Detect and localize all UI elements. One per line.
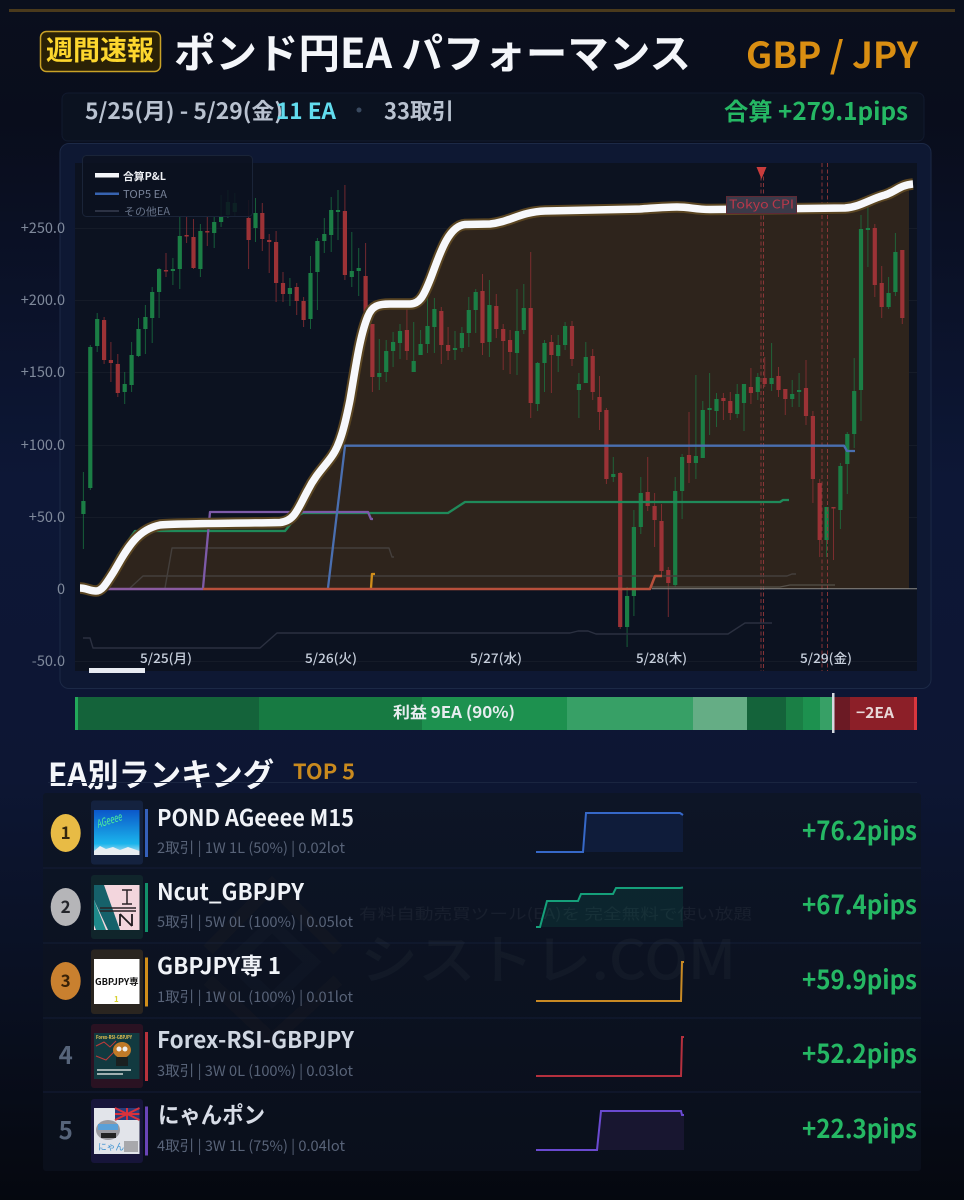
summary bar: 11 EA [276, 94, 337, 126]
thumbnail: nyanpon [91, 1099, 143, 1163]
watermark: シストレ.COM [360, 916, 736, 995]
thumbnail: GBPJPY専 [91, 950, 143, 1014]
row 1: 1 [61, 819, 71, 844]
row 1: +76.2pips [802, 811, 917, 848]
summary bar: 合算 +279.1pips [724, 92, 908, 127]
thumbnail: GBPJPY専: 1 [114, 994, 119, 1005]
profit and loss EA bar [75, 693, 917, 733]
y axis labels: 0 [57, 578, 65, 599]
row 5 [59, 1096, 917, 1163]
y axis labels [21, 217, 65, 671]
row 1: POND AGeeee M15 [157, 799, 354, 833]
row 2: Ncut_GBPJPY [157, 873, 305, 907]
chart legend [82, 156, 252, 219]
row 2: 2 [61, 893, 71, 918]
summary bar: 5/25(月) - 5/29(金) [85, 94, 283, 126]
title badge: 週間速報 [46, 29, 154, 68]
watermark [208, 885, 752, 1040]
cumulative area fill [80, 184, 913, 591]
x axis dates [140, 648, 852, 667]
ranking heading: EA別ランキング [48, 750, 274, 796]
thumbnail: nyanpon: にゃん [98, 1140, 124, 1153]
ranking heading: TOP 5 [293, 756, 355, 786]
chart legend: 合算P&L [123, 169, 166, 184]
thumbnail: AGeeee: AGeeee [94, 808, 125, 832]
event label: Tokyo CPI [726, 167, 796, 214]
x axis dates: 5/25(月) [140, 648, 192, 667]
summary bar [62, 92, 924, 141]
sparkline [536, 888, 683, 927]
y axis labels: -50.0 [32, 650, 65, 671]
row 1: 2取引 | 1W 1L (50%) | 0.02lot [157, 837, 346, 858]
event markers [761, 163, 828, 671]
row 2: +67.4pips [802, 885, 917, 922]
combined P&L line [80, 184, 913, 591]
sparkline [536, 813, 683, 852]
sparkline [536, 1037, 684, 1076]
other EA lines [83, 548, 917, 648]
x axis dates: 5/29(金) [800, 648, 852, 667]
summary bar: 33取引 [384, 94, 454, 126]
row 3: +59.9pips [802, 960, 917, 997]
row 5: にゃんポン [158, 1096, 265, 1130]
x axis dates: 5/27(水) [470, 648, 522, 667]
thumbnail: GBPJPY専: GBPJPY専 [95, 975, 138, 988]
x axis dates: 5/28(木) [636, 648, 687, 667]
row 4: Forex-RSI-GBPJPY [157, 1021, 355, 1055]
y axis labels: +50.0 [29, 506, 65, 527]
row 5: 5 [59, 1111, 73, 1146]
y axis labels: +200.0 [21, 289, 65, 310]
chart legend: TOP5 EA [123, 187, 168, 202]
row 2: 5取引 | 5W 0L (100%) | 0.05lot [157, 911, 354, 932]
x axis dates: 5/26(火) [305, 648, 357, 667]
thumbnail: Forex-RSI: Forex-RSI-GBPJPY [96, 1034, 132, 1041]
watermark: 有料自動売買ツール(EA)を 完全無料で使い放題 [359, 903, 752, 924]
row 1 [51, 799, 917, 864]
profit and loss EA bar: 利益 9EA (90%) [393, 699, 515, 723]
row 3: 3 [61, 967, 71, 992]
panel: ranking table [43, 793, 921, 1171]
y axis labels: +250.0 [21, 217, 65, 238]
row 2 [51, 873, 917, 939]
sparkline [536, 1111, 684, 1150]
row 5: 4取引 | 3W 1L (75%) | 0.04lot [157, 1135, 346, 1156]
chart legend: その他EA [124, 204, 171, 219]
thumbnail: Forex-RSI [91, 1024, 143, 1088]
row 5: +22.3pips [802, 1109, 917, 1146]
row 3: 1取引 | 1W 0L (100%) | 0.01lot [157, 986, 354, 1007]
ranking heading [48, 750, 917, 796]
thumbnail: Ncut [91, 875, 143, 939]
candlesticks [83, 185, 902, 647]
panel: P&L chart [21, 144, 931, 688]
thumbnail: AGeeee [91, 800, 143, 864]
y axis labels: +150.0 [21, 361, 65, 382]
event label: Tokyo CPI: Tokyo CPI [729, 196, 794, 212]
profit and loss EA bar: −2EA [856, 702, 894, 723]
sparkline [536, 962, 684, 1001]
y axis labels: +100.0 [21, 434, 65, 455]
top 5 EA lines [103, 446, 855, 589]
row 4: 3取引 | 3W 0L (100%) | 0.03lot [157, 1060, 354, 1081]
row 4 [59, 1021, 917, 1088]
title: ポンド円EA パフォーマンス [174, 20, 691, 80]
row 4: 4 [59, 1036, 73, 1071]
row 3: GBPJPY専 1 [157, 947, 281, 981]
row 4: +52.2pips [802, 1034, 917, 1071]
currency pair: GBP / JPY [746, 27, 919, 79]
row 3 [51, 947, 917, 1014]
